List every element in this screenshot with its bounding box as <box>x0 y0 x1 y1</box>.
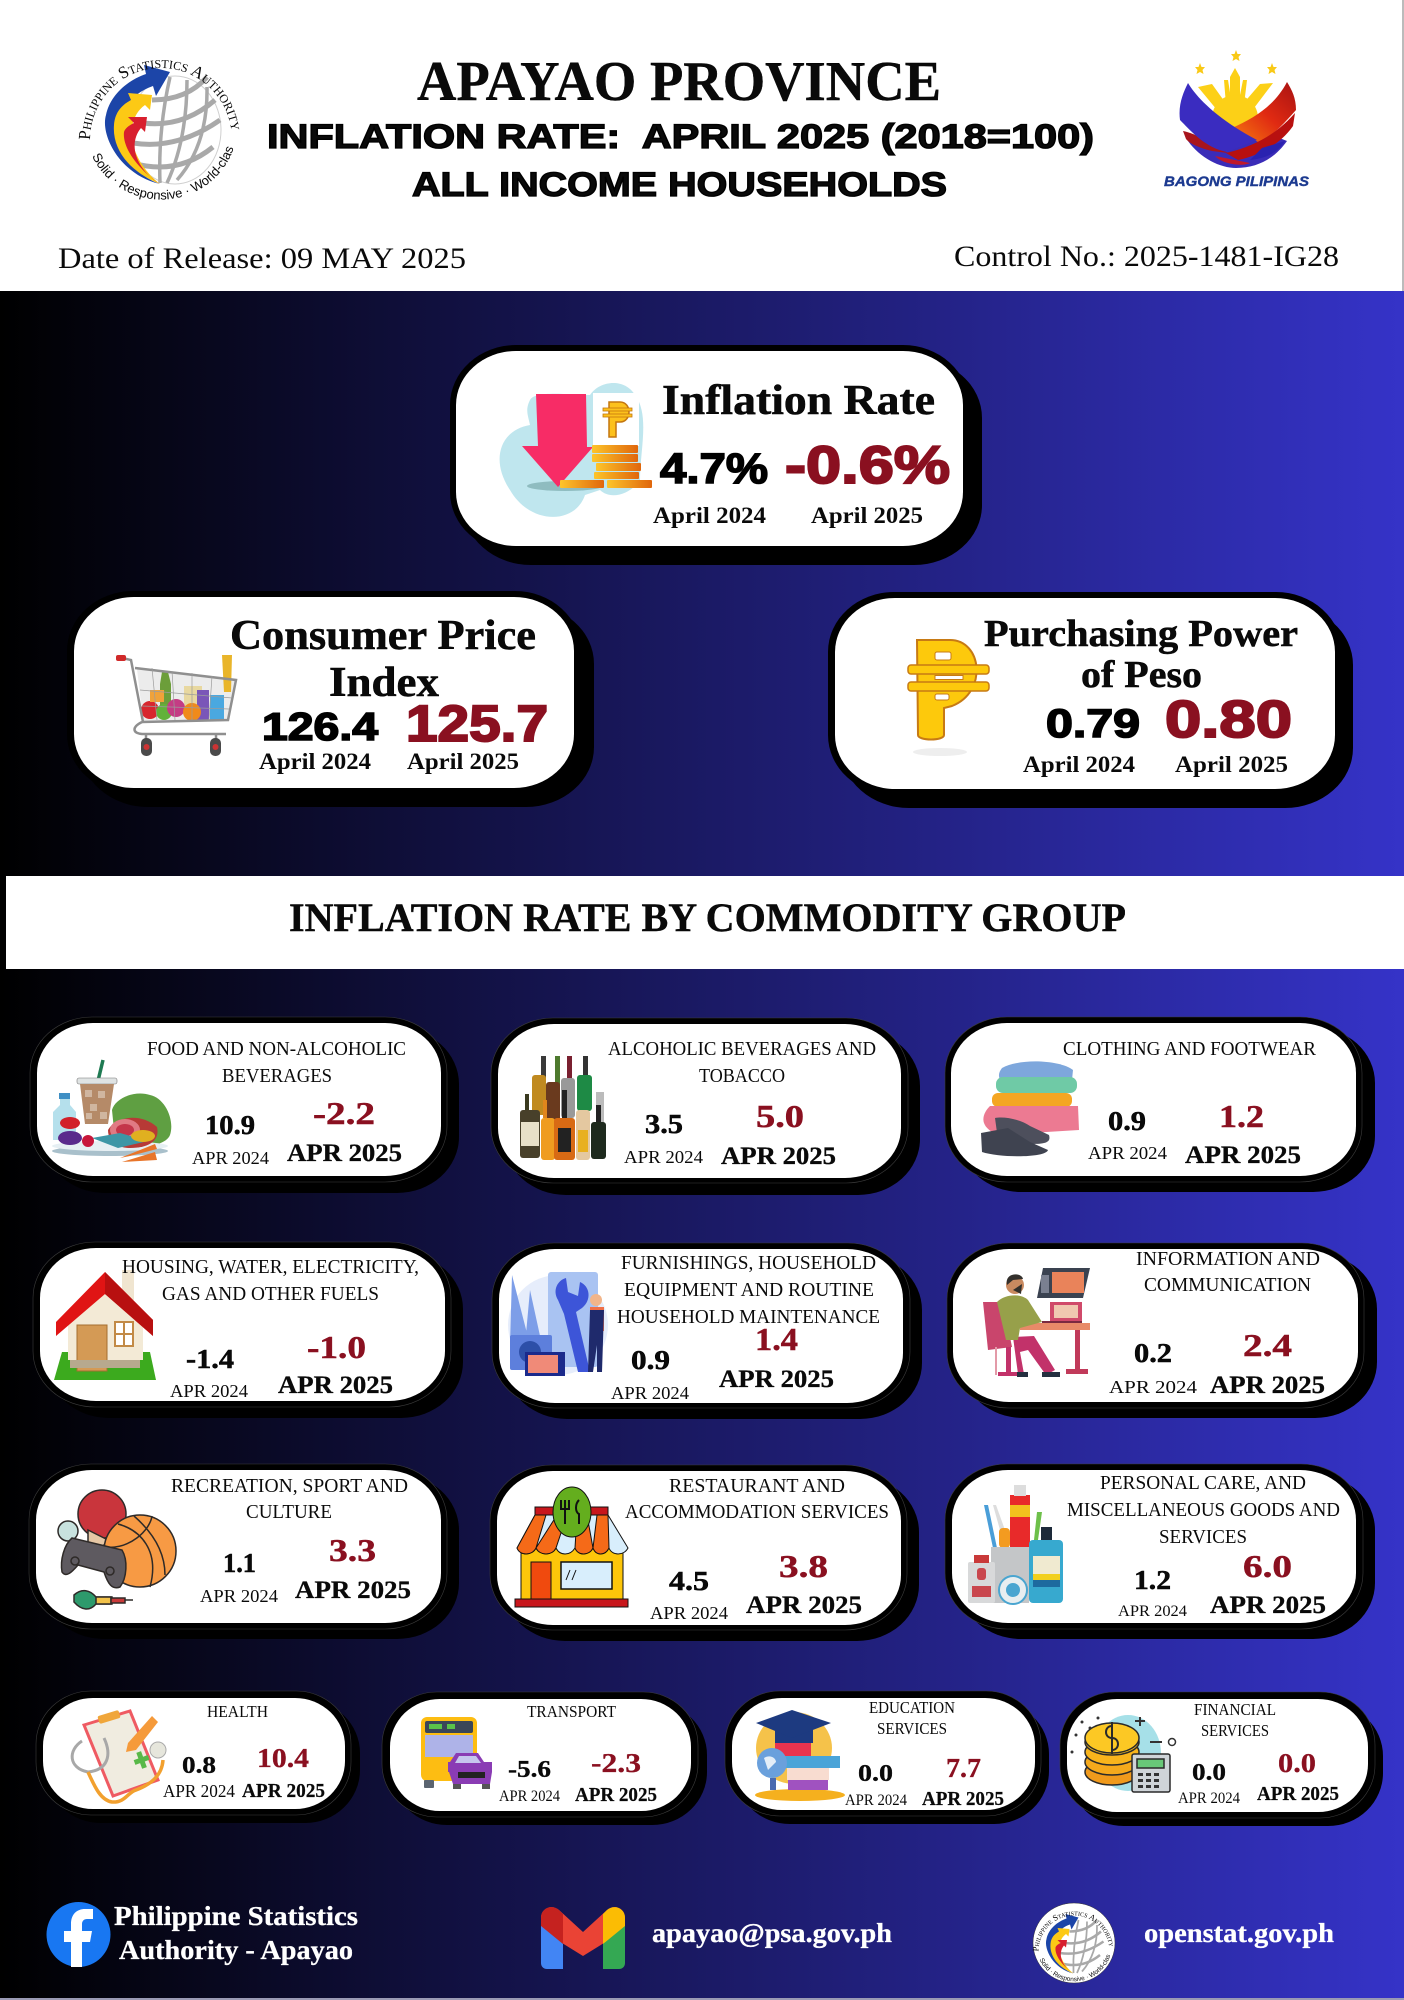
label: apr 2024: APR 2024 <box>1178 1790 1240 1807</box>
icon: graduation cap, books, globe <box>755 1710 845 1801</box>
heading: SERVICES <box>1201 1721 1269 1740</box>
icon: bottles <box>520 1056 606 1160</box>
value: apr 2024: 3.5 <box>645 1109 683 1139</box>
heading <box>608 1038 876 1087</box>
label: april 2025: April 2025 <box>1175 752 1288 777</box>
value: apr 2024: 0.8 <box>182 1753 216 1779</box>
heading: HOUSING, WATER, ELECTRICITY, <box>122 1256 419 1278</box>
panel: housing, water, electricity, gas and other fuels <box>33 1242 463 1418</box>
heading <box>625 1475 889 1523</box>
value: april 2024: 0.79 <box>1046 702 1140 746</box>
heading: CLOTHING AND FOOTWEAR <box>1063 1038 1316 1060</box>
icon: facebook <box>46 1902 110 1967</box>
icon: small PSA logo: Philippine Statistics Authority <box>1032 1912 1114 1952</box>
icon: bus and car <box>421 1717 492 1789</box>
icon: small PSA logo <box>1032 1902 1116 1984</box>
value: apr 2025: 7.7 <box>946 1753 981 1783</box>
value: apr 2024: 0.9 <box>1108 1106 1146 1136</box>
footer <box>46 1901 1334 1984</box>
value: april 2025: 0.80 <box>1165 691 1292 749</box>
panel: recreation, sport and culture <box>29 1464 459 1639</box>
label: apr 2024: APR 2024 <box>624 1147 703 1167</box>
label: apr 2025: APR 2025 <box>575 1784 657 1806</box>
icon: folded clothes and shoes <box>981 1061 1079 1156</box>
icon: restaurant storefront <box>515 1487 628 1607</box>
label: april 2024: April 2024 <box>259 749 372 774</box>
label: apr 2025: APR 2025 <box>922 1788 1004 1810</box>
panel: purchasing power of peso <box>828 592 1353 808</box>
panel: consumer price index <box>67 591 594 807</box>
label: apr 2025: APR 2025 <box>1210 1372 1325 1399</box>
subtitle: inflation rate: INFLATION RATE: APRIL 2025 (2018=100) <box>267 118 1094 156</box>
label: apr 2025: APR 2025 <box>719 1366 834 1393</box>
value: apr 2025: 6.0 <box>1243 1548 1292 1584</box>
panel: financial services <box>1060 1692 1383 1826</box>
value: april 2025: 125.7 <box>406 695 548 752</box>
label: apr 2024: APR 2024 <box>163 1781 235 1801</box>
value: apr 2025: 1.4 <box>755 1321 798 1357</box>
panel: food and non-alcoholic beverages <box>30 1017 459 1193</box>
facebook page name <box>114 1901 358 1965</box>
heading: ALCOHOLIC BEVERAGES AND <box>608 1038 876 1060</box>
value: apr 2025: 5.0 <box>756 1098 804 1134</box>
heading <box>984 613 1298 696</box>
value: apr 2025: -2.2 <box>313 1095 375 1131</box>
heading <box>869 1698 955 1738</box>
heading <box>617 1252 880 1328</box>
control number: Control No.: 2025-1481-IG28 <box>954 240 1339 273</box>
label: apr 2024: APR 2024 <box>845 1792 907 1809</box>
heading: SERVICES <box>1159 1526 1247 1548</box>
heading: FOOD AND NON-ALCOHOLIC <box>147 1038 406 1060</box>
value: apr 2024: -5.6 <box>508 1757 551 1783</box>
label: apr 2024: APR 2024 <box>192 1148 269 1168</box>
label: apr 2025: APR 2025 <box>287 1140 402 1167</box>
section banner: INFLATION RATE BY COMMODITY GROUP <box>289 895 1126 940</box>
label: apr 2025: APR 2025 <box>1210 1592 1326 1619</box>
heading: FURNISHINGS, HOUSEHOLD <box>621 1252 876 1274</box>
value: apr 2024: 10.9 <box>205 1110 255 1140</box>
icon: small PSA logo: Solid · Responsive · World-class <box>1040 1954 1110 1982</box>
subtitle: all income households: ALL INCOME HOUSEHOLDS <box>412 166 947 204</box>
section banner <box>6 876 1404 969</box>
panel: inflation rate <box>450 345 982 565</box>
heading: CULTURE <box>246 1501 332 1523</box>
heading: EDUCATION <box>869 1698 955 1717</box>
icon: PSA logo <box>78 60 240 200</box>
icon: shopping cart <box>116 655 236 756</box>
heading: RESTAURANT AND <box>669 1475 845 1497</box>
heading: MISCELLANEOUS GOODS AND <box>1067 1499 1340 1521</box>
value: apr 2024: 0.2 <box>1134 1338 1172 1368</box>
label: apr 2024: APR 2024 <box>1118 1603 1187 1620</box>
label: apr 2024: APR 2024 <box>1109 1377 1197 1397</box>
heading: GAS AND OTHER FUELS <box>162 1283 379 1305</box>
panel: furnishings, household equipment and routine household maintenance <box>492 1243 922 1419</box>
value: april 2025: -0.6% <box>785 436 950 495</box>
label: apr 2025: APR 2025 <box>1257 1783 1339 1805</box>
label: april 2024: April 2024 <box>653 503 767 528</box>
label: apr 2024: APR 2024 <box>650 1603 728 1623</box>
value: apr 2024: 0.9 <box>631 1345 670 1375</box>
icon: house <box>54 1270 156 1380</box>
heading: HEALTH <box>207 1702 268 1721</box>
icon: gmail <box>541 1907 625 1969</box>
value: apr 2025: 1.2 <box>1219 1098 1264 1134</box>
value: apr 2025: 3.8 <box>779 1548 828 1584</box>
header panel <box>58 0 1404 291</box>
panel: information and communication <box>947 1243 1377 1418</box>
value: apr 2025: 10.4 <box>257 1743 309 1773</box>
label: apr 2025: APR 2025 <box>1185 1142 1301 1169</box>
icon: peso sign <box>908 640 989 756</box>
icon: sports and games <box>58 1490 176 1609</box>
label: apr 2024: APR 2024 <box>499 1788 560 1805</box>
label: apr 2024: APR 2024 <box>170 1381 248 1401</box>
heading: COMMUNICATION <box>1144 1274 1311 1296</box>
heading: Inflation Rate <box>662 378 935 424</box>
value: apr 2024: 1.1 <box>223 1548 256 1578</box>
heading <box>1194 1700 1276 1740</box>
heading <box>122 1256 419 1305</box>
panel: transport <box>382 1692 707 1825</box>
heading: FINANCIAL <box>1194 1700 1276 1719</box>
date of release: Date of Release: 09 MAY 2025 <box>58 242 466 275</box>
value: april 2024: 4.7% <box>660 445 768 493</box>
icon: small peso sign <box>603 402 632 437</box>
panel: health <box>36 1691 360 1823</box>
value: april 2024: 126.4 <box>262 706 378 749</box>
icon: toiletries <box>968 1485 1063 1604</box>
heading: BEVERAGES <box>222 1065 332 1087</box>
heading <box>147 1038 406 1087</box>
label: apr 2024: APR 2024 <box>1088 1143 1167 1163</box>
facebook page name: Philippine Statistics <box>114 1901 358 1931</box>
label: apr 2024: APR 2024 <box>200 1586 278 1606</box>
title: APAYAO PROVINCE <box>417 51 941 113</box>
heading: PERSONAL CARE, AND <box>1100 1472 1306 1494</box>
label: apr 2025: APR 2025 <box>295 1577 411 1604</box>
heading: INFORMATION AND <box>1136 1248 1320 1270</box>
heading: TOBACCO <box>699 1065 785 1087</box>
value: apr 2025: 2.4 <box>1243 1327 1292 1363</box>
panel: alcoholic beverages and tobacco <box>491 1018 920 1195</box>
label: apr 2024: APR 2024 <box>611 1383 689 1403</box>
heading: Consumer Price <box>230 613 536 659</box>
value: apr 2025: 3.3 <box>329 1532 376 1568</box>
heading <box>171 1475 408 1523</box>
label: apr 2025: APR 2025 <box>242 1780 325 1802</box>
label: april 2024: April 2024 <box>1023 752 1136 777</box>
value: apr 2024: 0.0 <box>1192 1760 1226 1786</box>
heading: RECREATION, SPORT AND <box>171 1475 408 1497</box>
heading: of Peso <box>1081 654 1202 696</box>
heading: Index <box>329 660 439 706</box>
email address: apayao@psa.gov.ph <box>652 1918 892 1948</box>
icon: clipboard and stethoscope <box>72 1710 166 1802</box>
heading: TRANSPORT <box>527 1702 616 1721</box>
heading: SERVICES <box>877 1719 947 1738</box>
value: apr 2025: -2.3 <box>591 1748 641 1778</box>
value: apr 2024: 0.0 <box>858 1761 893 1787</box>
value: apr 2024: 1.2 <box>1134 1565 1171 1595</box>
heading <box>1067 1472 1340 1548</box>
icon: coins and calculator <box>1070 1715 1176 1792</box>
heading: EQUIPMENT AND ROUTINE <box>624 1279 874 1301</box>
heading <box>1136 1248 1320 1296</box>
label: apr 2025: APR 2025 <box>278 1372 393 1399</box>
panel: education services <box>725 1691 1049 1824</box>
icon: food <box>52 1060 171 1162</box>
icon: Bagong Pilipinas logo: BAGONG PILIPINAS <box>1164 173 1310 189</box>
value: apr 2024: -1.4 <box>186 1344 234 1374</box>
heading: Purchasing Power <box>984 613 1298 655</box>
facebook page name: Authority - Apayao <box>119 1935 353 1965</box>
heading: ACCOMMODATION SERVICES <box>625 1501 889 1523</box>
icon: appliances and repair worker <box>508 1272 608 1376</box>
label: april 2025: April 2025 <box>811 503 923 528</box>
icon: person at computer <box>983 1268 1090 1377</box>
value: apr 2025: 0.0 <box>1278 1748 1316 1778</box>
icon: PSA logo: Philippine Statistics Authority <box>78 60 240 140</box>
label: apr 2025: APR 2025 <box>746 1592 862 1619</box>
website: openstat.gov.ph <box>1144 1918 1334 1948</box>
value: apr 2025: -1.0 <box>307 1329 366 1365</box>
heading <box>230 613 536 706</box>
label: april 2025: April 2025 <box>407 749 519 774</box>
panel: clothing and footwear <box>945 1017 1375 1192</box>
label: apr 2025: APR 2025 <box>721 1143 836 1170</box>
icon: Bagong Pilipinas logo <box>1164 50 1310 189</box>
icon: falling arrow with coins <box>500 383 652 517</box>
heading: HOUSEHOLD MAINTENANCE <box>617 1306 880 1328</box>
value: apr 2024: 4.5 <box>669 1566 709 1596</box>
panel: personal care and miscellaneous goods and services <box>945 1464 1375 1639</box>
panel: restaurant and accommodation services <box>490 1465 919 1641</box>
